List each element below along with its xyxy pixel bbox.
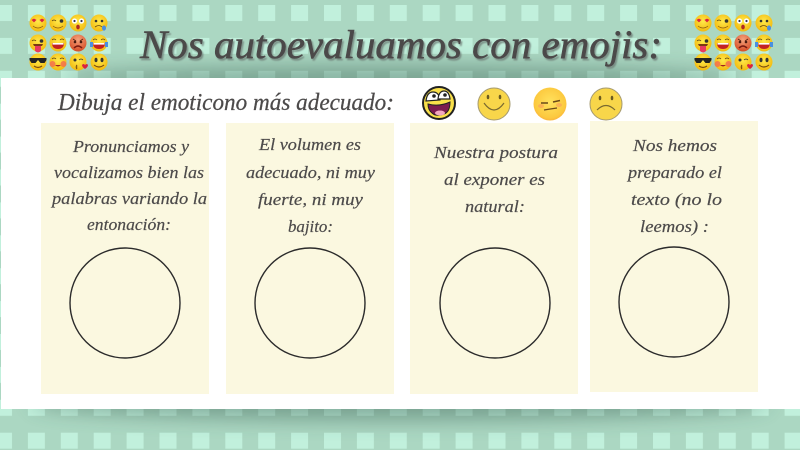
text: volume criterion: fuerte, ni muy <box>258 190 364 209</box>
white content panel <box>1 78 800 409</box>
text: pronunciation criterion: entonación: <box>87 215 171 234</box>
icon: annoyed emoticon <box>534 88 566 120</box>
icon: smiling emoticon <box>478 88 510 120</box>
text: preparation criterion: Nos hemos <box>632 136 717 155</box>
panel: pronunciation <box>41 123 209 394</box>
text: posture criterion: al exponer es <box>444 170 545 189</box>
text: preparation criterion: texto (no lo <box>631 190 722 209</box>
text: pronunciation criterion: palabras variando la <box>51 189 207 208</box>
text: volume criterion: bajito: <box>288 217 333 236</box>
panel: preparation <box>590 121 758 392</box>
icon: laughing emoticon <box>423 87 455 119</box>
text: pronunciation criterion <box>51 137 207 234</box>
icon: emoji grid left <box>30 14 108 70</box>
text: preparation criterion <box>627 136 722 236</box>
drawing circle 4 <box>619 247 729 357</box>
text: volume criterion: adecuado, ni muy <box>246 163 375 182</box>
instruction heading: Dibuja el emoticono más adecuado: <box>57 90 394 116</box>
drawing circle 3 <box>440 248 550 358</box>
text: posture criterion: natural: <box>465 197 525 216</box>
text: posture criterion <box>433 143 558 216</box>
text: volume criterion <box>246 135 375 236</box>
text: posture criterion: Nuestra postura <box>433 143 558 162</box>
panel: posture <box>410 123 578 394</box>
icon: emoji grid right <box>694 14 773 70</box>
drawing circle 1 <box>70 248 180 358</box>
icon: sad emoticon <box>590 88 622 120</box>
text: preparation criterion: leemos) : <box>640 217 709 236</box>
text: pronunciation criterion: vocalizamos bien las <box>54 163 204 182</box>
panel: volume <box>226 123 394 394</box>
drawing circle 2 <box>255 248 365 358</box>
text: preparation criterion: preparado el <box>627 163 722 182</box>
text: volume criterion: El volumen es <box>258 135 361 154</box>
title: Nos autoevaluamos con emojis: <box>139 22 662 67</box>
text: pronunciation criterion: Pronunciamos y <box>72 137 189 156</box>
